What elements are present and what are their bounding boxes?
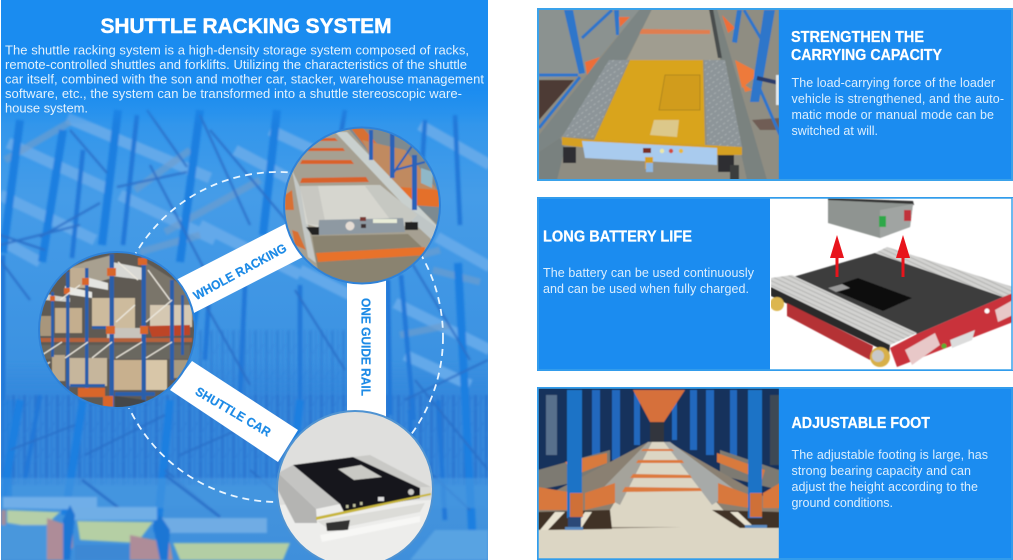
band: whole racking: WHOLE RACKING <box>191 241 289 303</box>
intro paragraph: car itself, combined with the son and mother car, stacker, warehouse management <box>5 72 484 86</box>
photo: rack aisle with orange footings <box>538 388 780 560</box>
heading: CARRYING CAPACITY <box>791 47 943 64</box>
floor layers <box>1 478 488 508</box>
body text: The load-carrying force of the loader <box>792 76 995 90</box>
upper beams <box>0 118 490 385</box>
main posts <box>3 110 473 547</box>
intro paragraph: software, etc., the system can be transformed into a shuttle stereoscopic ware- <box>5 86 462 101</box>
body text: The adjustable footing is large, has <box>792 448 988 462</box>
photo circle: shuttle car <box>276 410 434 560</box>
body text: vehicle is strengthened, and the auto- <box>792 92 1004 106</box>
photo: yellow shuttle car on rails <box>538 9 780 180</box>
warehouse rack background <box>0 0 490 560</box>
dashed orbit circle <box>113 172 443 502</box>
panel: adjustable foot <box>537 387 1013 560</box>
panel: strengthen the carrying capacity <box>537 8 1013 181</box>
illustration: battery lifted from shuttle <box>770 198 1013 367</box>
arrow: battery up left <box>830 235 844 277</box>
intro paragraph: remote-controlled shuttles and forklifts. Utilizing the characteristics of the shuttle <box>5 57 467 72</box>
body text <box>792 448 988 510</box>
heading: LONG BATTERY LIFE <box>543 228 692 246</box>
body text: matic mode or manual mode can be <box>792 108 994 122</box>
body text: adjust the height according to the <box>792 480 978 494</box>
diagonal braces <box>0 110 488 520</box>
band: one guide rail: ONE GUIDE RAIL <box>358 298 372 396</box>
body text: The battery can be used continuously <box>543 266 755 280</box>
band: one guide rail <box>347 275 386 417</box>
band: shuttle car: SHUTTLE CAR <box>193 384 273 440</box>
heading <box>791 29 943 64</box>
title: SHUTTLE RACKING SYSTEM <box>100 14 392 38</box>
body text: switched at will. <box>792 124 878 138</box>
body text: and can be used when fully charged. <box>543 282 749 296</box>
panel: long battery life <box>537 197 1013 371</box>
shuttle cars on the floor <box>1 497 488 560</box>
photo circle: loaded racks <box>38 251 196 409</box>
photo circle: shuttle on rail <box>283 126 441 284</box>
body text: strong bearing capacity and can <box>792 464 971 478</box>
arrow: battery up right <box>896 235 910 277</box>
intro paragraph <box>5 42 484 116</box>
intro paragraph: house system. <box>5 100 88 116</box>
band: whole racking <box>170 223 303 315</box>
heading: ADJUSTABLE FOOT <box>792 415 930 432</box>
heading: STRENGTHEN THE <box>791 29 924 46</box>
panel: shuttle racking system overview <box>0 0 490 560</box>
body text <box>543 266 755 296</box>
band: shuttle car <box>170 361 298 462</box>
intro paragraph: The shuttle racking system is a high-density storage system composed of racks, <box>5 42 469 58</box>
body text <box>792 76 1004 138</box>
body text: ground conditions. <box>792 496 893 510</box>
